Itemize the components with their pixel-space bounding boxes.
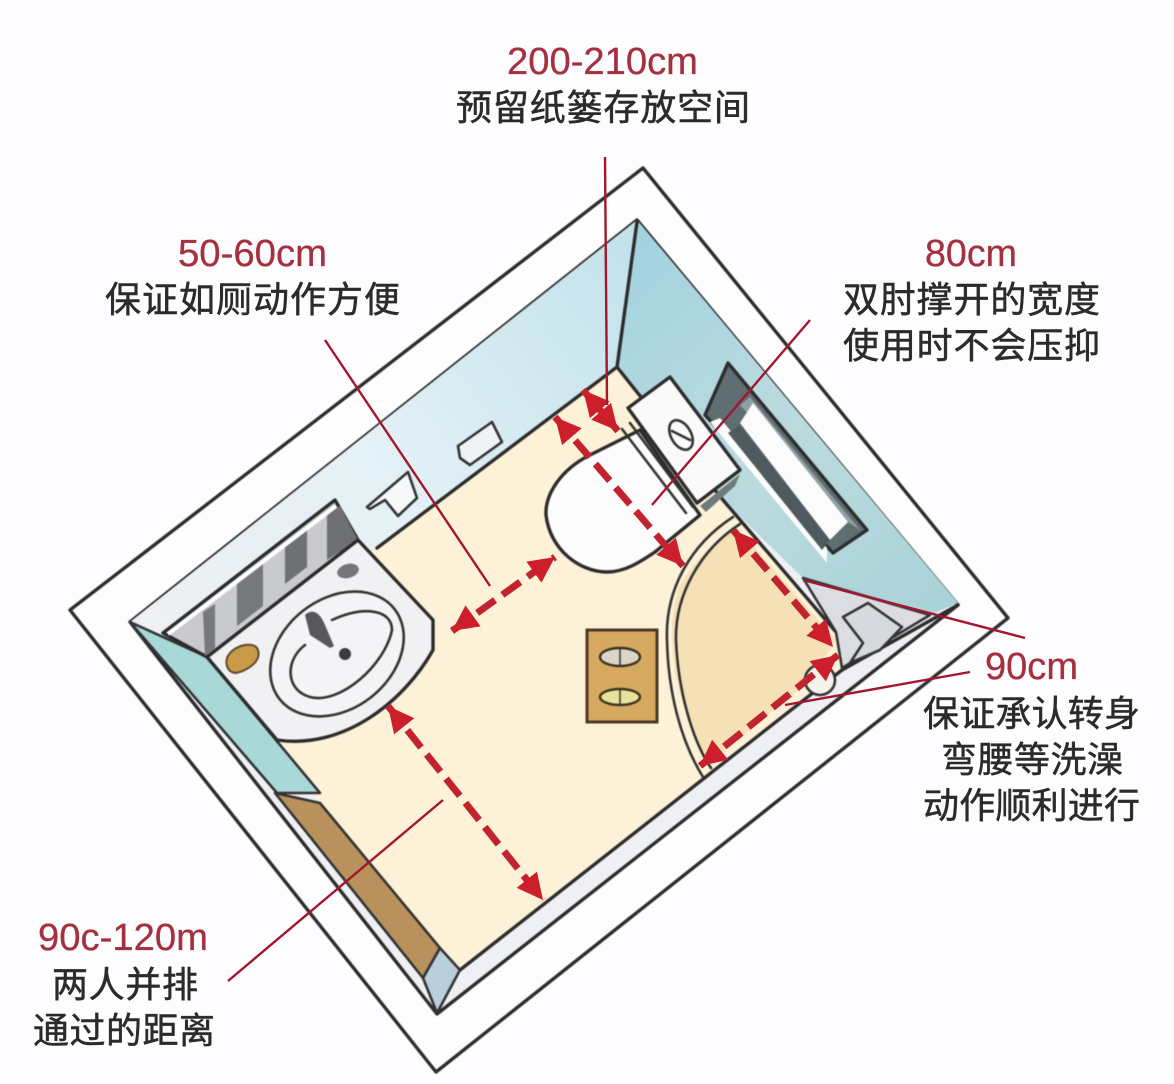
floor edges [377,222,958,970]
leader line: 90c-120m [228,800,443,981]
soap [226,645,259,673]
floor [207,367,842,970]
label: 200-210cm [456,41,750,128]
shower door arc [667,517,733,777]
label: 90cm: 90cm [985,646,1078,688]
label: 50-60cm: 50-60cm [178,233,327,275]
label: 90cm: 动作顺利进行 [923,785,1140,826]
label: 80cm: 双肘撑开的宽度 [843,279,1100,320]
toilet bowl [546,430,700,572]
faucet [305,612,334,648]
door leaf [275,793,460,1013]
tap knob [336,561,360,581]
label: 90cm: 保证承认转身 [923,693,1140,734]
inner wall outline [130,220,958,1014]
dimension arrow: 50-60cm [452,557,555,631]
label: 90c-120m: 90c-120m [38,917,208,959]
shower fixture [843,603,902,663]
drain [339,648,351,660]
label: 90c-120m [33,917,215,1051]
shower floor [672,528,836,765]
dimension arrow: shower depth [700,655,838,766]
paper holder [458,422,502,465]
basin inner [291,611,392,698]
label: 80cm: 使用时不会压抑 [843,325,1100,366]
slipper [600,648,640,666]
back wall band [130,220,637,633]
label: 80cm [843,233,1100,366]
wash basin counter [207,540,433,742]
leader line: 50-60cm [325,340,490,586]
outer wall [70,168,1008,1072]
right wall band [617,220,958,615]
label: 90c-120m: 通过的距离 [33,1010,215,1051]
label: 90cm [923,646,1140,826]
leader line: 200-210cm [605,157,607,405]
basin outer [246,566,428,742]
label: 200-210cm: 200-210cm [507,41,698,83]
label: 200-210cm: 预留纸篓存放空间 [456,87,750,128]
dimension arrow: 80cm [555,417,683,566]
dimension arrow: 200-210cm [583,390,618,431]
wall niche [705,363,867,563]
left wall band [130,622,320,793]
slipper [600,689,640,705]
leader lines: 90cm [785,580,1025,705]
dimension arrow: 90-120cm [388,706,543,900]
shower recess [803,578,930,668]
leader line: 80cm [652,320,810,505]
label: 90cm: 弯腰等洗澡 [941,739,1123,780]
dimension arrow: shower width [733,530,833,647]
flush button [664,416,698,454]
bathroom floor plan [70,168,1008,1072]
bath mat [587,630,657,722]
towel holder [367,472,417,516]
label: 50-60cm [105,233,400,320]
mirror stripes [327,506,358,560]
label: 80cm: 80cm [925,233,1017,275]
label: 90c-120m: 两人并排 [52,964,198,1005]
floor drain [805,665,835,695]
mirror and shelf [163,500,358,657]
toilet tank [622,377,740,513]
label: 50-60cm: 保证如厕动作方便 [105,279,400,320]
door corner [423,948,460,1013]
